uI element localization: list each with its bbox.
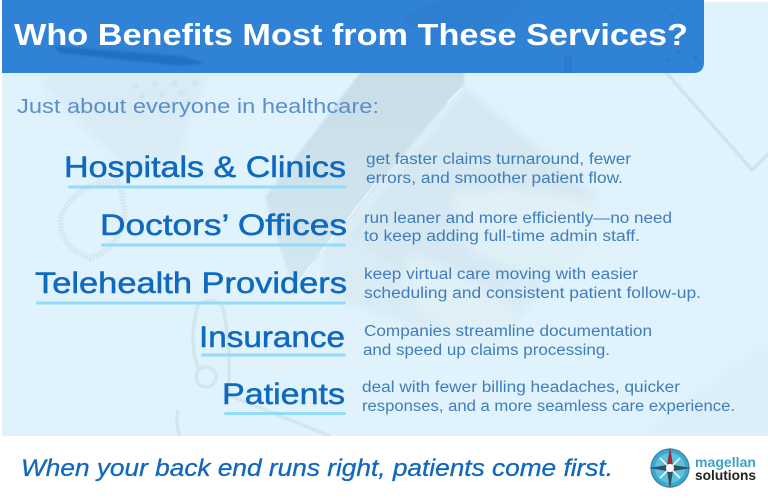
description: [366, 151, 631, 187]
description: [362, 379, 735, 415]
logo: magellan solutions: [649, 447, 756, 489]
laptop keyboard: [350, 92, 585, 300]
stethoscope: [177, 300, 330, 436]
row: doctors offices: [100, 209, 672, 246]
logo: magellan solutions: solutions: [695, 467, 756, 483]
heading: Insurance: [199, 321, 345, 354]
heading: Hospitals & Clinics: [64, 151, 346, 184]
description: errors, and smoother patient flow.: [366, 170, 623, 187]
row: insurance: [199, 321, 652, 359]
logo wordmark: magellan: [695, 454, 756, 470]
hand: [410, 194, 578, 300]
title: Who Benefits Most from These Services?: [14, 17, 688, 52]
intro line: Just about everyone in healthcare:: [17, 96, 379, 118]
title banner: [2, 0, 704, 73]
soft light band: [640, 340, 768, 436]
description: get faster claims turnaround, fewer: [366, 151, 631, 168]
description: keep virtual care moving with easier: [364, 266, 638, 283]
row: patients: [222, 378, 735, 415]
description: Companies streamline documentation: [364, 323, 652, 340]
banner photo hints: [54, 0, 700, 73]
icon: compass: [649, 447, 691, 489]
heading: Telehealth Providers: [35, 267, 347, 300]
heading: Doctors’ Offices: [100, 209, 347, 242]
phone keypad: [132, 80, 198, 110]
row: telehealth providers: [35, 266, 701, 304]
laptop edge highlights: [293, 88, 462, 290]
description: run leaner and more efficiently—no need: [364, 210, 672, 227]
laptop screen: [265, 60, 464, 290]
row: hospitals and clinics: [64, 151, 631, 188]
description: responses, and a more seamless care experience.: [362, 398, 735, 415]
heading: Patients: [222, 378, 345, 411]
phone cord: [60, 182, 125, 258]
description: to keep adding full-time admin staff.: [364, 228, 640, 245]
description: and speed up claims processing.: [363, 342, 610, 359]
description: scheduling and consistent patient follow-up.: [364, 285, 701, 302]
desk phone: [35, 73, 210, 170]
footer tagline: When your back end runs right, patients come first.: [21, 455, 613, 482]
laptop base: [328, 144, 588, 324]
description: [363, 323, 652, 359]
description: [364, 210, 672, 245]
description: [364, 266, 701, 302]
description: deal with fewer billing headaches, quicker: [362, 379, 680, 396]
clipboard outline: [664, 70, 768, 170]
